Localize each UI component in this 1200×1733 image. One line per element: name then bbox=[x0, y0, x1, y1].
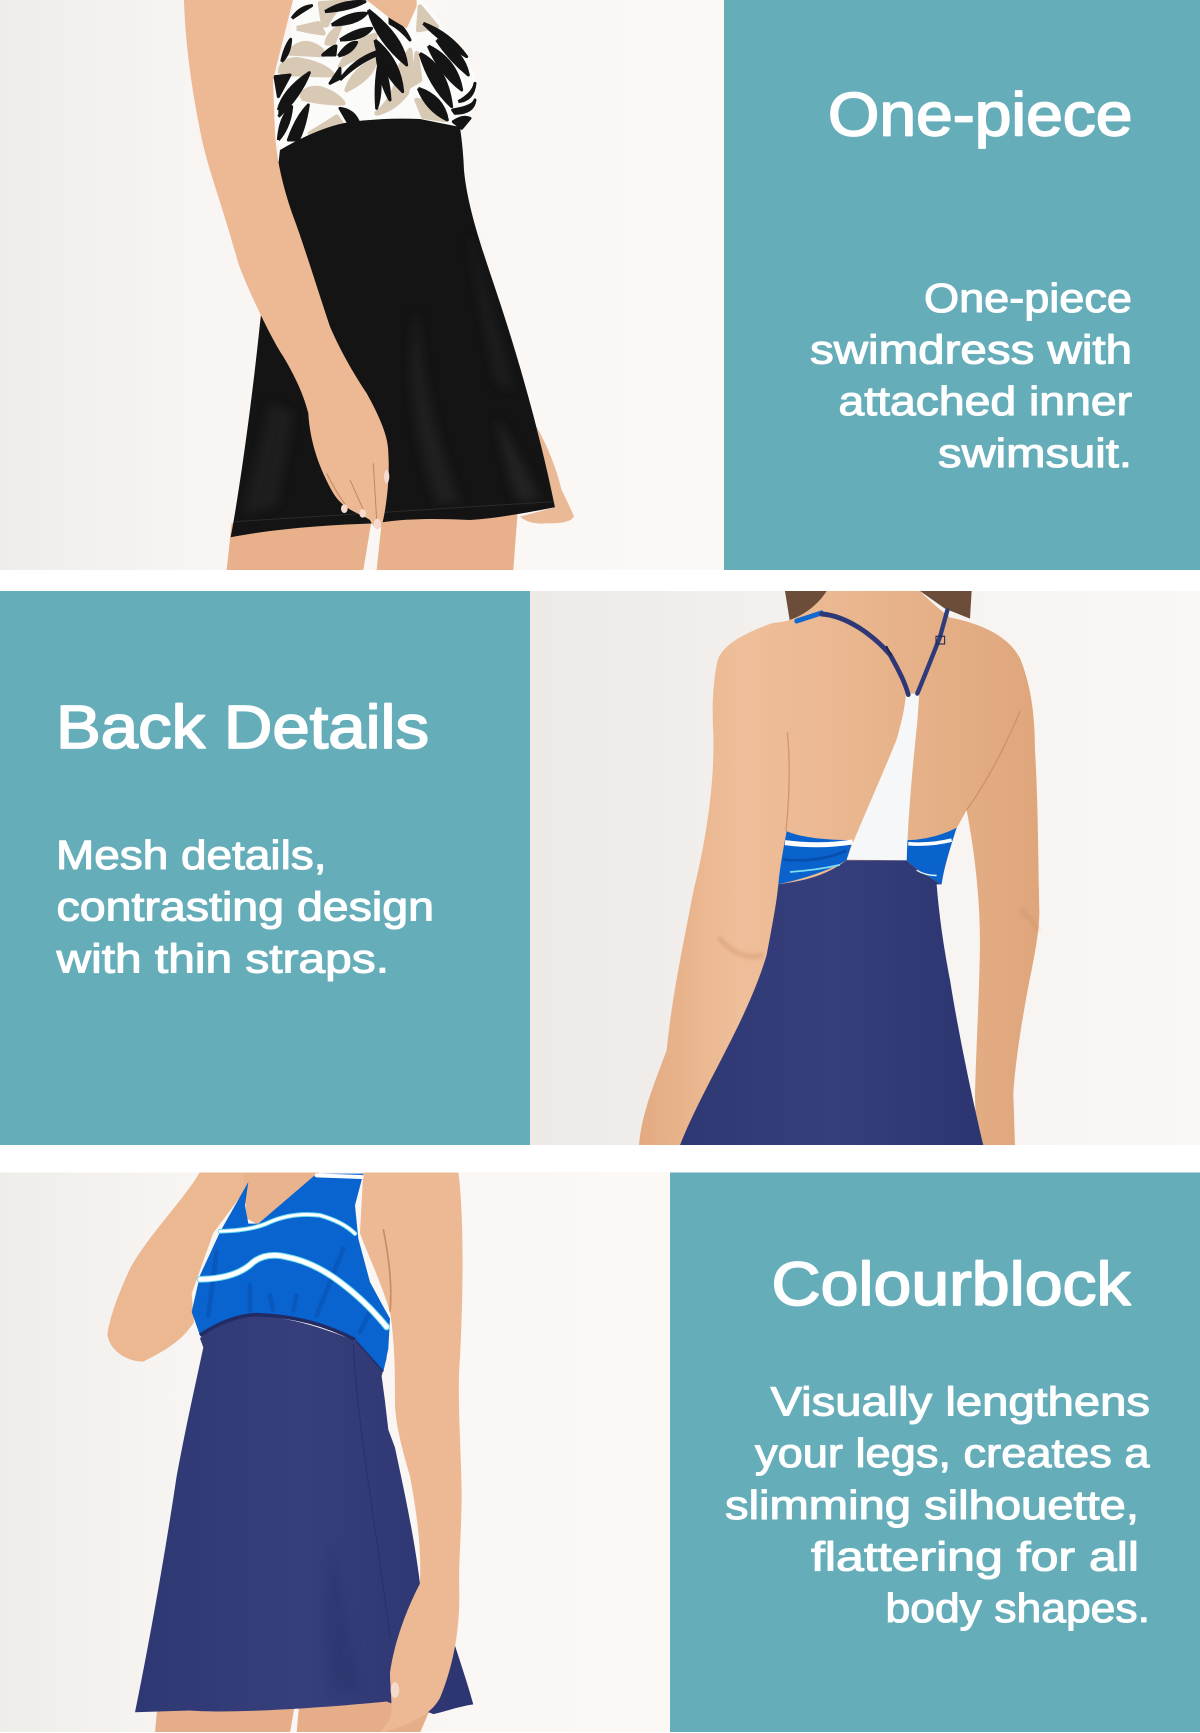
description: colourblock: body shapes. bbox=[886, 1585, 1150, 1631]
description: back details: contrasting design bbox=[56, 884, 434, 930]
panel: back details photo bbox=[530, 591, 1200, 1145]
black swimdress skirt bbox=[231, 119, 555, 537]
white mesh panel bbox=[847, 693, 919, 860]
panel: colourblock text bbox=[670, 1172, 1200, 1732]
description: one-piece bbox=[810, 275, 1132, 476]
panel: back details text bbox=[0, 591, 530, 1145]
leaf print bodice bbox=[273, 0, 477, 150]
hair bbox=[785, 591, 972, 622]
model's side arm and hand bbox=[360, 1172, 463, 1733]
panel: colourblock photo bbox=[0, 1172, 670, 1733]
panel: one-piece text bbox=[724, 0, 1200, 570]
heading: Colourblock: Colourblock bbox=[772, 1250, 1131, 1318]
tie-dye back band bbox=[778, 828, 957, 884]
navy skirt bbox=[135, 1315, 473, 1714]
description: one-piece: swimdress with bbox=[810, 327, 1132, 373]
model's arm and hand bbox=[184, 0, 389, 529]
description: back details: with thin straps. bbox=[55, 936, 389, 982]
panel: one-piece photo bbox=[0, 0, 724, 570]
heading: One-piece: One-piece bbox=[828, 80, 1132, 148]
model's back and arms bbox=[639, 591, 1039, 1145]
navy skirt bbox=[680, 860, 983, 1145]
description: colourblock bbox=[725, 1378, 1150, 1631]
description: one-piece: attached inner bbox=[838, 378, 1132, 424]
description: back details: Mesh details, bbox=[56, 832, 326, 878]
model's legs and far hand bbox=[227, 427, 574, 570]
description: colourblock: Visually lengthens bbox=[770, 1378, 1150, 1424]
heading: Back Details: Back Details bbox=[56, 693, 429, 761]
description: colourblock: slimming silhouette, bbox=[725, 1482, 1139, 1528]
description: colourblock: your legs, creates a bbox=[755, 1430, 1150, 1476]
description: one-piece: One-piece bbox=[924, 275, 1132, 321]
model's legs bbox=[155, 1702, 429, 1732]
description: one-piece: swimsuit. bbox=[938, 430, 1132, 476]
thin navy straps bbox=[797, 610, 947, 695]
model's raised arm and chest bbox=[107, 1172, 320, 1362]
description: back details bbox=[55, 832, 434, 982]
tie-dye bodice bbox=[192, 1174, 390, 1372]
description: colourblock: flattering for all bbox=[811, 1533, 1139, 1579]
